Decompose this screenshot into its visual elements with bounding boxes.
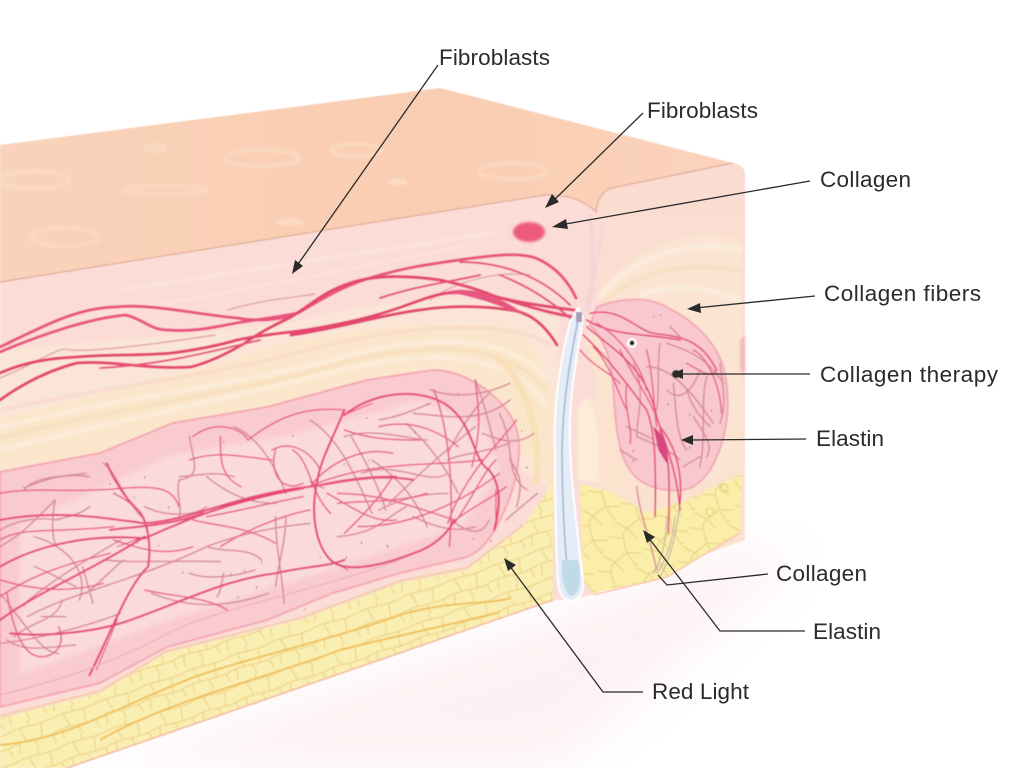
callout: Fibroblasts (surface) xyxy=(292,45,550,274)
left fibre network xyxy=(0,380,537,675)
callout: Collagen therapy xyxy=(671,362,999,387)
callout: Fibroblasts (cell) xyxy=(545,98,758,208)
right face tint xyxy=(590,163,745,595)
top skin surface xyxy=(0,88,733,282)
right fibre network xyxy=(580,312,724,577)
callout: Collagen (root): Collagen xyxy=(776,561,867,586)
callout: Red Light xyxy=(504,558,750,704)
skin block illustration xyxy=(0,88,745,768)
left yellow fat layer xyxy=(0,482,553,768)
callout: Elastin (lobe): Elastin xyxy=(816,426,884,451)
callout: Collagen (root) xyxy=(658,561,867,586)
right pink lobe xyxy=(590,300,728,490)
callout: Collagen fibers: Collagen fibers xyxy=(824,281,981,306)
cream dermis bands, left xyxy=(0,232,560,490)
block base: dermis silhouette xyxy=(0,163,745,768)
fibroblast cell xyxy=(513,222,545,242)
upper fibre bundle xyxy=(0,255,576,400)
callout: Red Light: Red Light xyxy=(652,679,750,704)
callout: Collagen: Collagen xyxy=(820,167,911,192)
callout: Collagen xyxy=(552,167,911,229)
callout: Collagen therapy: Collagen therapy xyxy=(820,362,999,387)
hair shaft xyxy=(555,308,583,601)
skin surface edge lines xyxy=(0,163,733,282)
right yellow fat layer xyxy=(580,473,742,595)
callout: Elastin (lobe) xyxy=(681,426,884,451)
callout: Elastin (root): Elastin xyxy=(813,619,881,644)
cream dermis bands, right xyxy=(578,215,745,500)
callout: Collagen fibers xyxy=(687,281,981,313)
callout: Elastin (root) xyxy=(643,530,881,644)
callout: Fibroblasts (surface): Fibroblasts xyxy=(439,45,550,70)
soft shadow under skin block xyxy=(90,545,800,768)
left pink lobe xyxy=(0,370,519,707)
callout: Fibroblasts (cell): Fibroblasts xyxy=(647,98,758,123)
collagen therapy dots xyxy=(627,338,680,378)
lobe lighter centre xyxy=(20,400,500,675)
pale band beneath left lobe xyxy=(0,560,400,695)
